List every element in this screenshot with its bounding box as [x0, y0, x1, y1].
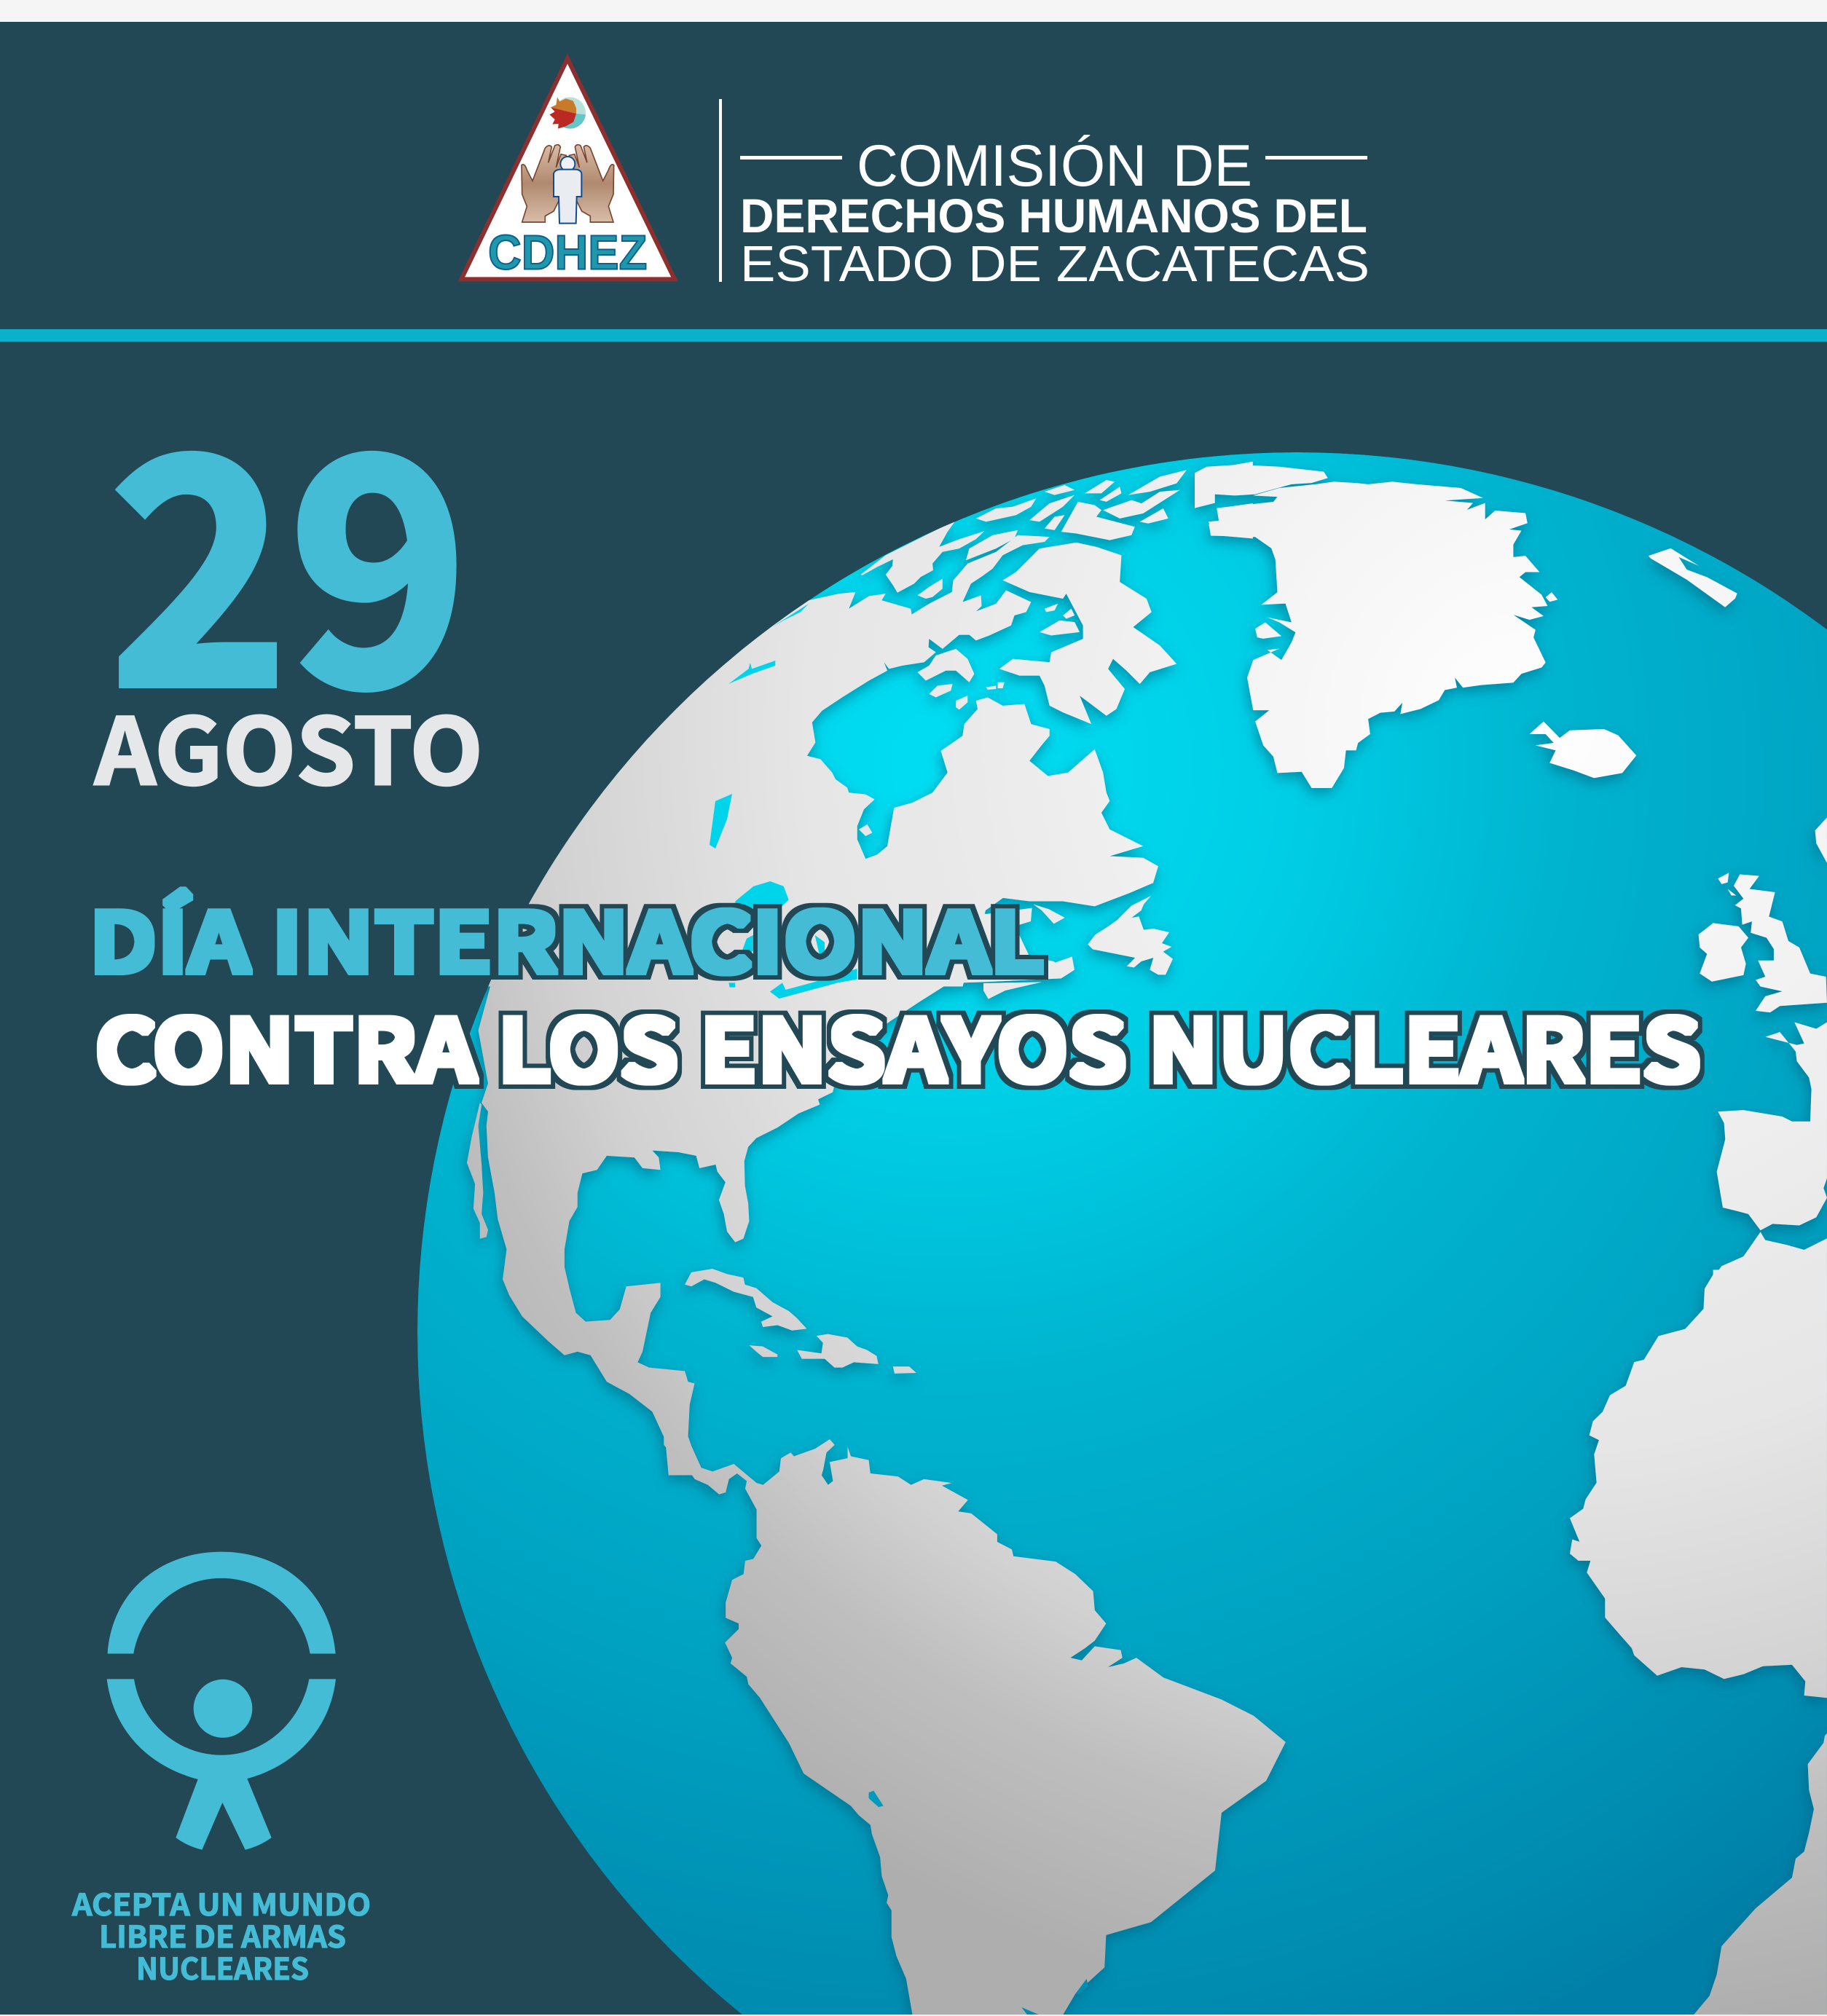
caption line 1: ACEPTA UN MUNDO — [71, 1881, 371, 1924]
logo wordmark: CDHEZ — [488, 226, 647, 280]
heading line 2: CONTRA LOS ENSAYOS NUCLEARES — [95, 982, 1701, 1106]
emblem caption — [71, 1881, 371, 1988]
caption line 3: NUCLEARES — [136, 1945, 309, 1988]
date month: AGOSTO — [94, 679, 483, 811]
date number: 29 — [109, 321, 468, 775]
header accent bar — [0, 329, 1827, 342]
heading line 1: DÍA INTERNACIONAL — [89, 877, 1045, 996]
ocean — [417, 452, 1827, 2016]
bottom page strip — [0, 2015, 1827, 2016]
triangle frame — [461, 59, 675, 279]
line right — [1265, 156, 1367, 160]
text line 3: ESTADO DE ZACATECAS — [740, 235, 1370, 292]
icon: sun and moon — [549, 97, 586, 129]
emblem body — [107, 1679, 336, 1850]
caption line 2: LIBRE DE ARMAS — [99, 1913, 346, 1956]
icon: hands — [522, 145, 614, 222]
line left — [740, 156, 842, 160]
header title: institution name — [740, 133, 1370, 292]
globe — [417, 452, 1827, 2015]
header divider — [719, 99, 722, 282]
text line 2: DERECHOS HUMANOS DEL — [740, 189, 1367, 243]
text line 1: COMISIÓN DE — [857, 133, 1252, 199]
lakes — [710, 604, 1088, 2015]
top page strip — [0, 0, 1827, 22]
icon: person — [554, 157, 581, 224]
continents — [460, 462, 1827, 2015]
emblem arc — [108, 1552, 336, 1653]
icon: disarmament emblem — [107, 1552, 336, 1850]
logo: CDHEZ triangle — [461, 59, 675, 280]
emblem head — [194, 1680, 252, 1738]
